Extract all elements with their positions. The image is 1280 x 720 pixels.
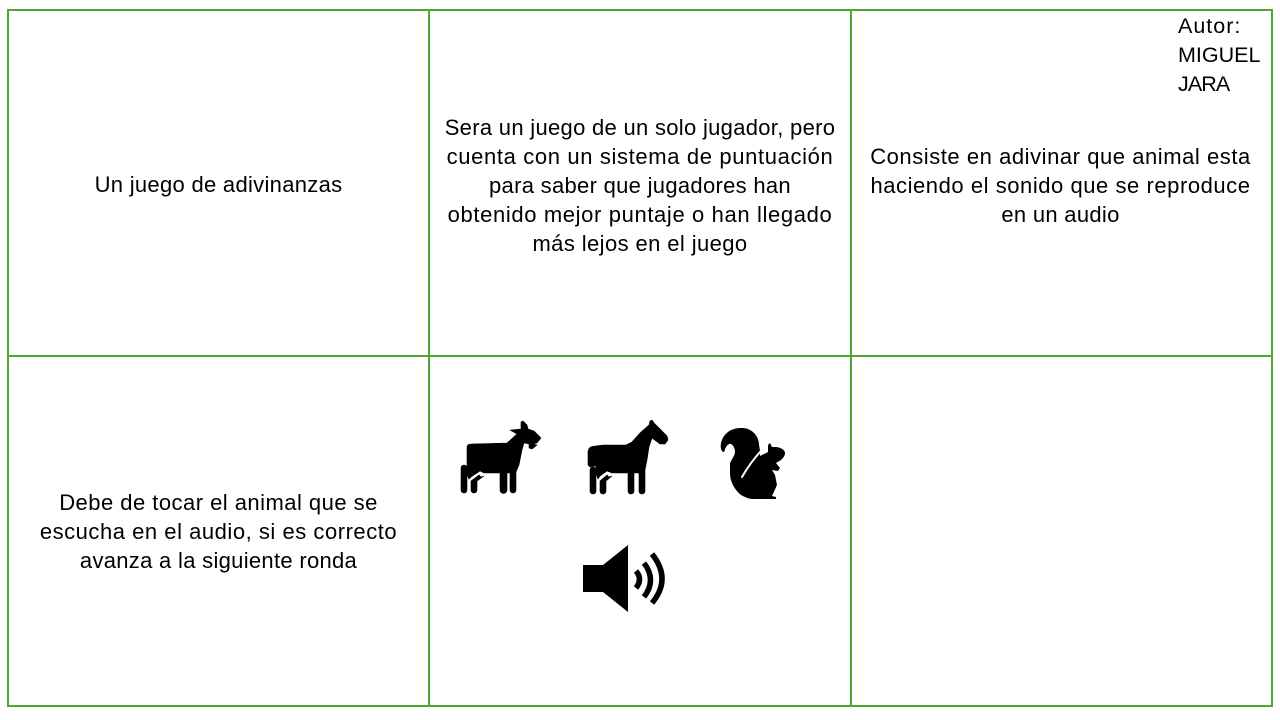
text: how to play: Debe de tocar el animal que se [59,490,378,515]
panel: cell top middle [428,9,852,357]
icon: squirrel [721,428,785,499]
text: game description: Consiste en adivinar que animal esta [870,144,1251,169]
text: author [1178,14,1260,96]
text: how to play: avanza a la siguiente ronda [80,548,357,573]
text: how to play: escucha en el audio, si es correcto [40,519,397,544]
text: game description: haciendo el sonido que se reproduce [870,173,1251,198]
text: author: JARA [1178,72,1229,96]
text: single player and scoring [445,115,835,256]
panel: cell top right [850,9,1273,357]
text: author: MIGUEL [1178,43,1260,67]
panel: cell top left [7,9,430,357]
text: author: Autor: [1178,14,1241,38]
panel: cell bottom right [850,355,1273,707]
text: single player and scoring: Sera un juego de un solo jugador, pero [445,115,835,140]
text: game description [870,144,1251,227]
icon: horse [588,420,668,494]
text: game description: en un audio [1001,202,1120,227]
panel: cell bottom middle [428,355,852,707]
text: single player and scoring: para saber que jugadores han [489,173,791,198]
text: single player and scoring: cuenta con un sistema de puntuación [447,144,833,169]
panel: cell bottom left [7,355,430,707]
text: single player and scoring: más lejos en el juego [532,231,748,256]
icon: goat [461,421,541,493]
icon: speaker with sound waves [583,545,662,612]
text: how to play [40,490,397,573]
text: game type: Un juego de adivinanzas [95,172,342,197]
text: single player and scoring: obtenido mejor puntaje o han llegado [448,202,832,227]
